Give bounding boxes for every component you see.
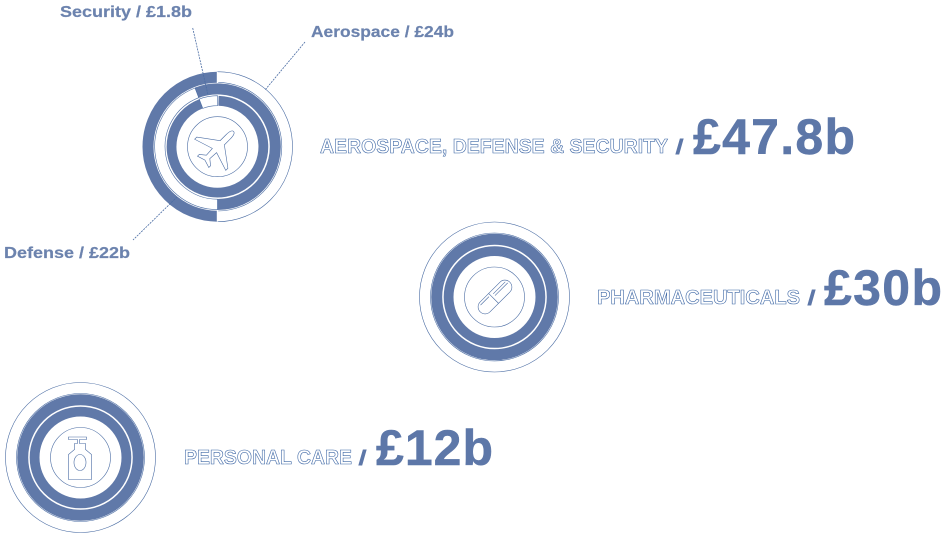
value: 12b: £12b — [376, 420, 493, 476]
donut chart: pharmaceuticals — [420, 222, 570, 372]
label: aerospace: Aerospace / £24b — [311, 24, 454, 41]
panel: personal care — [6, 382, 493, 532]
icon: pump bottle — [68, 437, 92, 480]
donut chart: aerospace, defense and security — [148, 72, 292, 222]
separator slash: / — [675, 136, 684, 159]
leader line: aerospace — [265, 42, 305, 90]
label: defense: Defense / £22b — [4, 245, 130, 262]
value: 30b: £30b — [824, 260, 942, 316]
heading: personal care: PERSONAL CARE — [184, 447, 352, 469]
leader line: defense — [133, 197, 177, 240]
icon: capsule — [475, 277, 515, 317]
heading: pharmaceuticals: PHARMACEUTICALS — [597, 287, 800, 309]
label: security: Security / £1.8b — [60, 4, 192, 21]
donut chart: personal care — [6, 382, 156, 532]
icon: airplane — [188, 116, 249, 177]
separator slash: / — [807, 287, 816, 310]
separator slash: / — [358, 447, 367, 470]
leader line: security — [193, 28, 208, 95]
heading: aerospace, defense and security: AEROSPACE, DEFENSE & SECURITY — [320, 136, 669, 158]
panel: pharmaceuticals — [420, 222, 942, 372]
value: 47.8b: £47.8b — [693, 109, 855, 165]
panel: aerospace, defense and security — [4, 4, 855, 262]
